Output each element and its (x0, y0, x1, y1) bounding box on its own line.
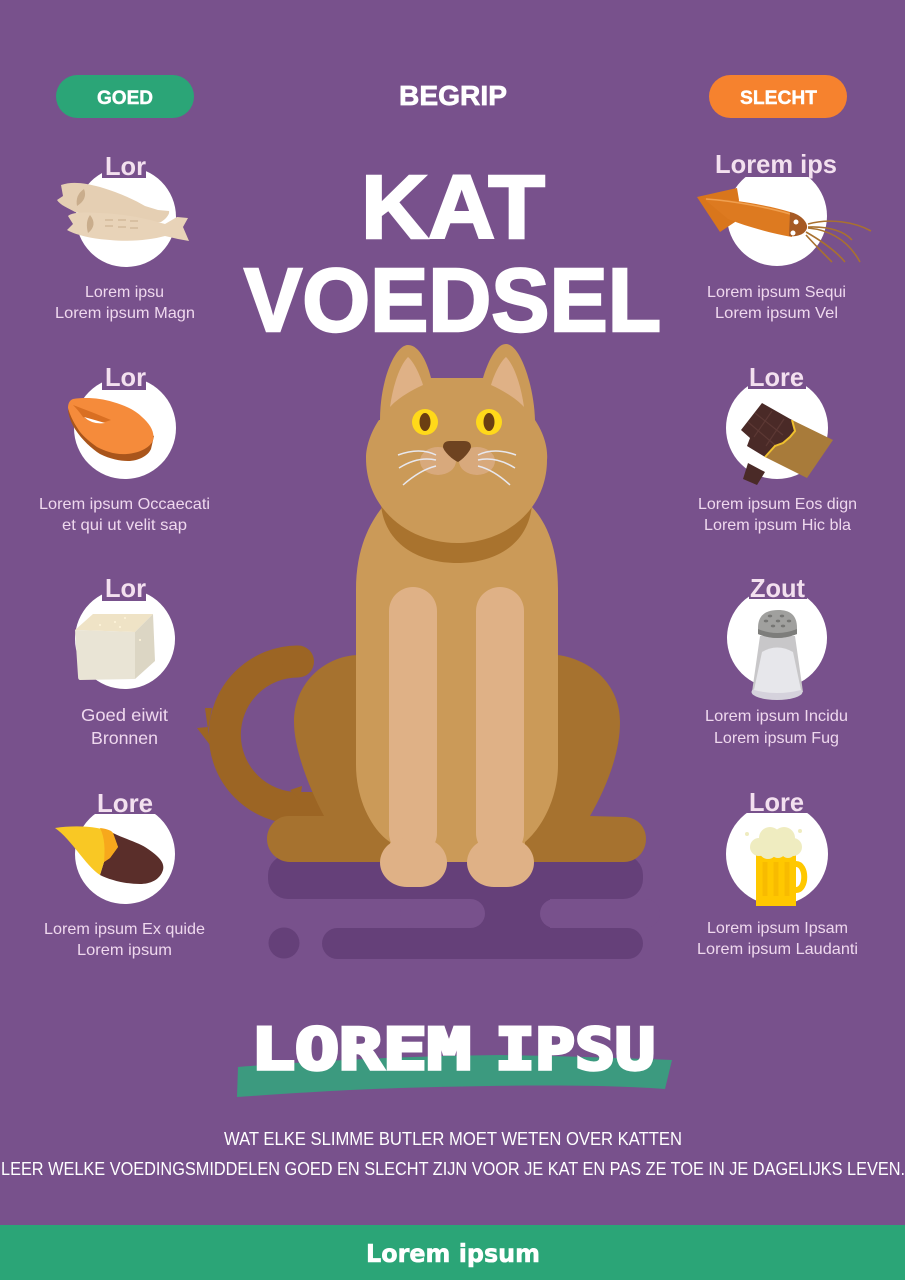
subtitle: lorem ipsu: LOREM (251, 1017, 471, 1083)
text: salt (705, 708, 848, 747)
panel: beer: Lore (749, 787, 804, 817)
illustration: cat (197, 344, 660, 959)
panel: chocolate: Lore (749, 362, 804, 392)
text: chocolate: Lorem ipsum Hic bla (704, 517, 851, 534)
icon: fish (57, 183, 189, 241)
badge: goed: GOED (97, 88, 153, 109)
icon: tofu block (75, 614, 155, 680)
cat tail (197, 646, 335, 808)
text: salt: Lorem ipsum Fug (714, 730, 839, 747)
panel: sweet potato (44, 787, 205, 959)
panel: tofu: Lor (105, 573, 146, 603)
text: tofu (81, 705, 168, 748)
text: chocolate: Lorem ipsum Eos dign (698, 496, 857, 513)
title: KAT (361, 158, 545, 258)
footer bar: Lorem ipsum (366, 1239, 540, 1268)
icon: salt shaker (752, 610, 803, 700)
subtitle: lorem ipsu: IPSU (495, 1017, 655, 1083)
badge: slecht: SLECHT (740, 88, 817, 109)
panel: fish (55, 150, 195, 322)
text: squid: Lorem ipsum Vel (715, 305, 838, 322)
text: salmon (39, 496, 210, 534)
text: description (1, 1129, 905, 1179)
cat haunches (267, 655, 646, 862)
text: chocolate (698, 496, 857, 534)
text: tofu: Bronnen (91, 728, 158, 748)
panel: fish: Lor (105, 151, 146, 181)
icon: chocolate bar (741, 403, 833, 485)
cat front legs (380, 587, 534, 887)
heading: begrip: BEGRIP (399, 80, 507, 111)
text: description: WAT ELKE SLIMME BUTLER MOET WETEN OVER KATTEN (224, 1129, 682, 1149)
text: sweet potato (44, 921, 205, 959)
text: tofu: Goed eiwit (81, 705, 168, 725)
text: fish: Lorem ipsu (85, 284, 164, 301)
text: sweet potato: Lorem ipsum Ex quide (44, 921, 205, 938)
text: salt: Lorem ipsum Incidu (705, 708, 848, 725)
badge: goed (56, 75, 194, 118)
panel: sweet potato: Lore (97, 788, 153, 818)
title: VOEDSEL (244, 251, 661, 351)
text: beer: Lorem ipsum Laudanti (697, 941, 858, 958)
icon: beer mug (745, 827, 804, 906)
cat collar (381, 505, 532, 563)
text: beer: Lorem ipsum Ipsam (707, 920, 848, 937)
cat head (366, 344, 547, 543)
panel: squid (697, 149, 871, 322)
icon: squid (697, 188, 871, 262)
text: sweet potato: Lorem ipsum (77, 942, 172, 959)
cat body (356, 505, 558, 862)
panel: salt: Zout (750, 573, 805, 603)
text: salmon: Lorem ipsum Occaecati (39, 496, 210, 513)
panel: chocolate (698, 362, 857, 534)
text: salmon: et qui ut velit sap (62, 517, 187, 534)
panel: salmon: Lor (105, 362, 146, 392)
badge: slecht (709, 75, 847, 118)
cat shadow (268, 855, 660, 959)
panel: salt (705, 572, 848, 747)
icon: sweet potato (55, 826, 163, 884)
panel: tofu (75, 573, 175, 748)
icon: salmon steak (68, 398, 154, 461)
text: squid: Lorem ipsum Sequi (707, 284, 846, 301)
subtitle: lorem ipsu (251, 1017, 655, 1083)
panel: salmon (39, 362, 210, 534)
text: fish: Lorem ipsum Magn (55, 305, 195, 322)
text: fish (55, 284, 195, 322)
panel: beer (697, 787, 858, 958)
text: beer (697, 920, 858, 958)
title (244, 158, 661, 351)
brush stroke (237, 1055, 672, 1097)
panel: squid: Lorem ips (715, 149, 837, 179)
text: squid (707, 284, 846, 322)
footer bar (0, 1225, 905, 1280)
